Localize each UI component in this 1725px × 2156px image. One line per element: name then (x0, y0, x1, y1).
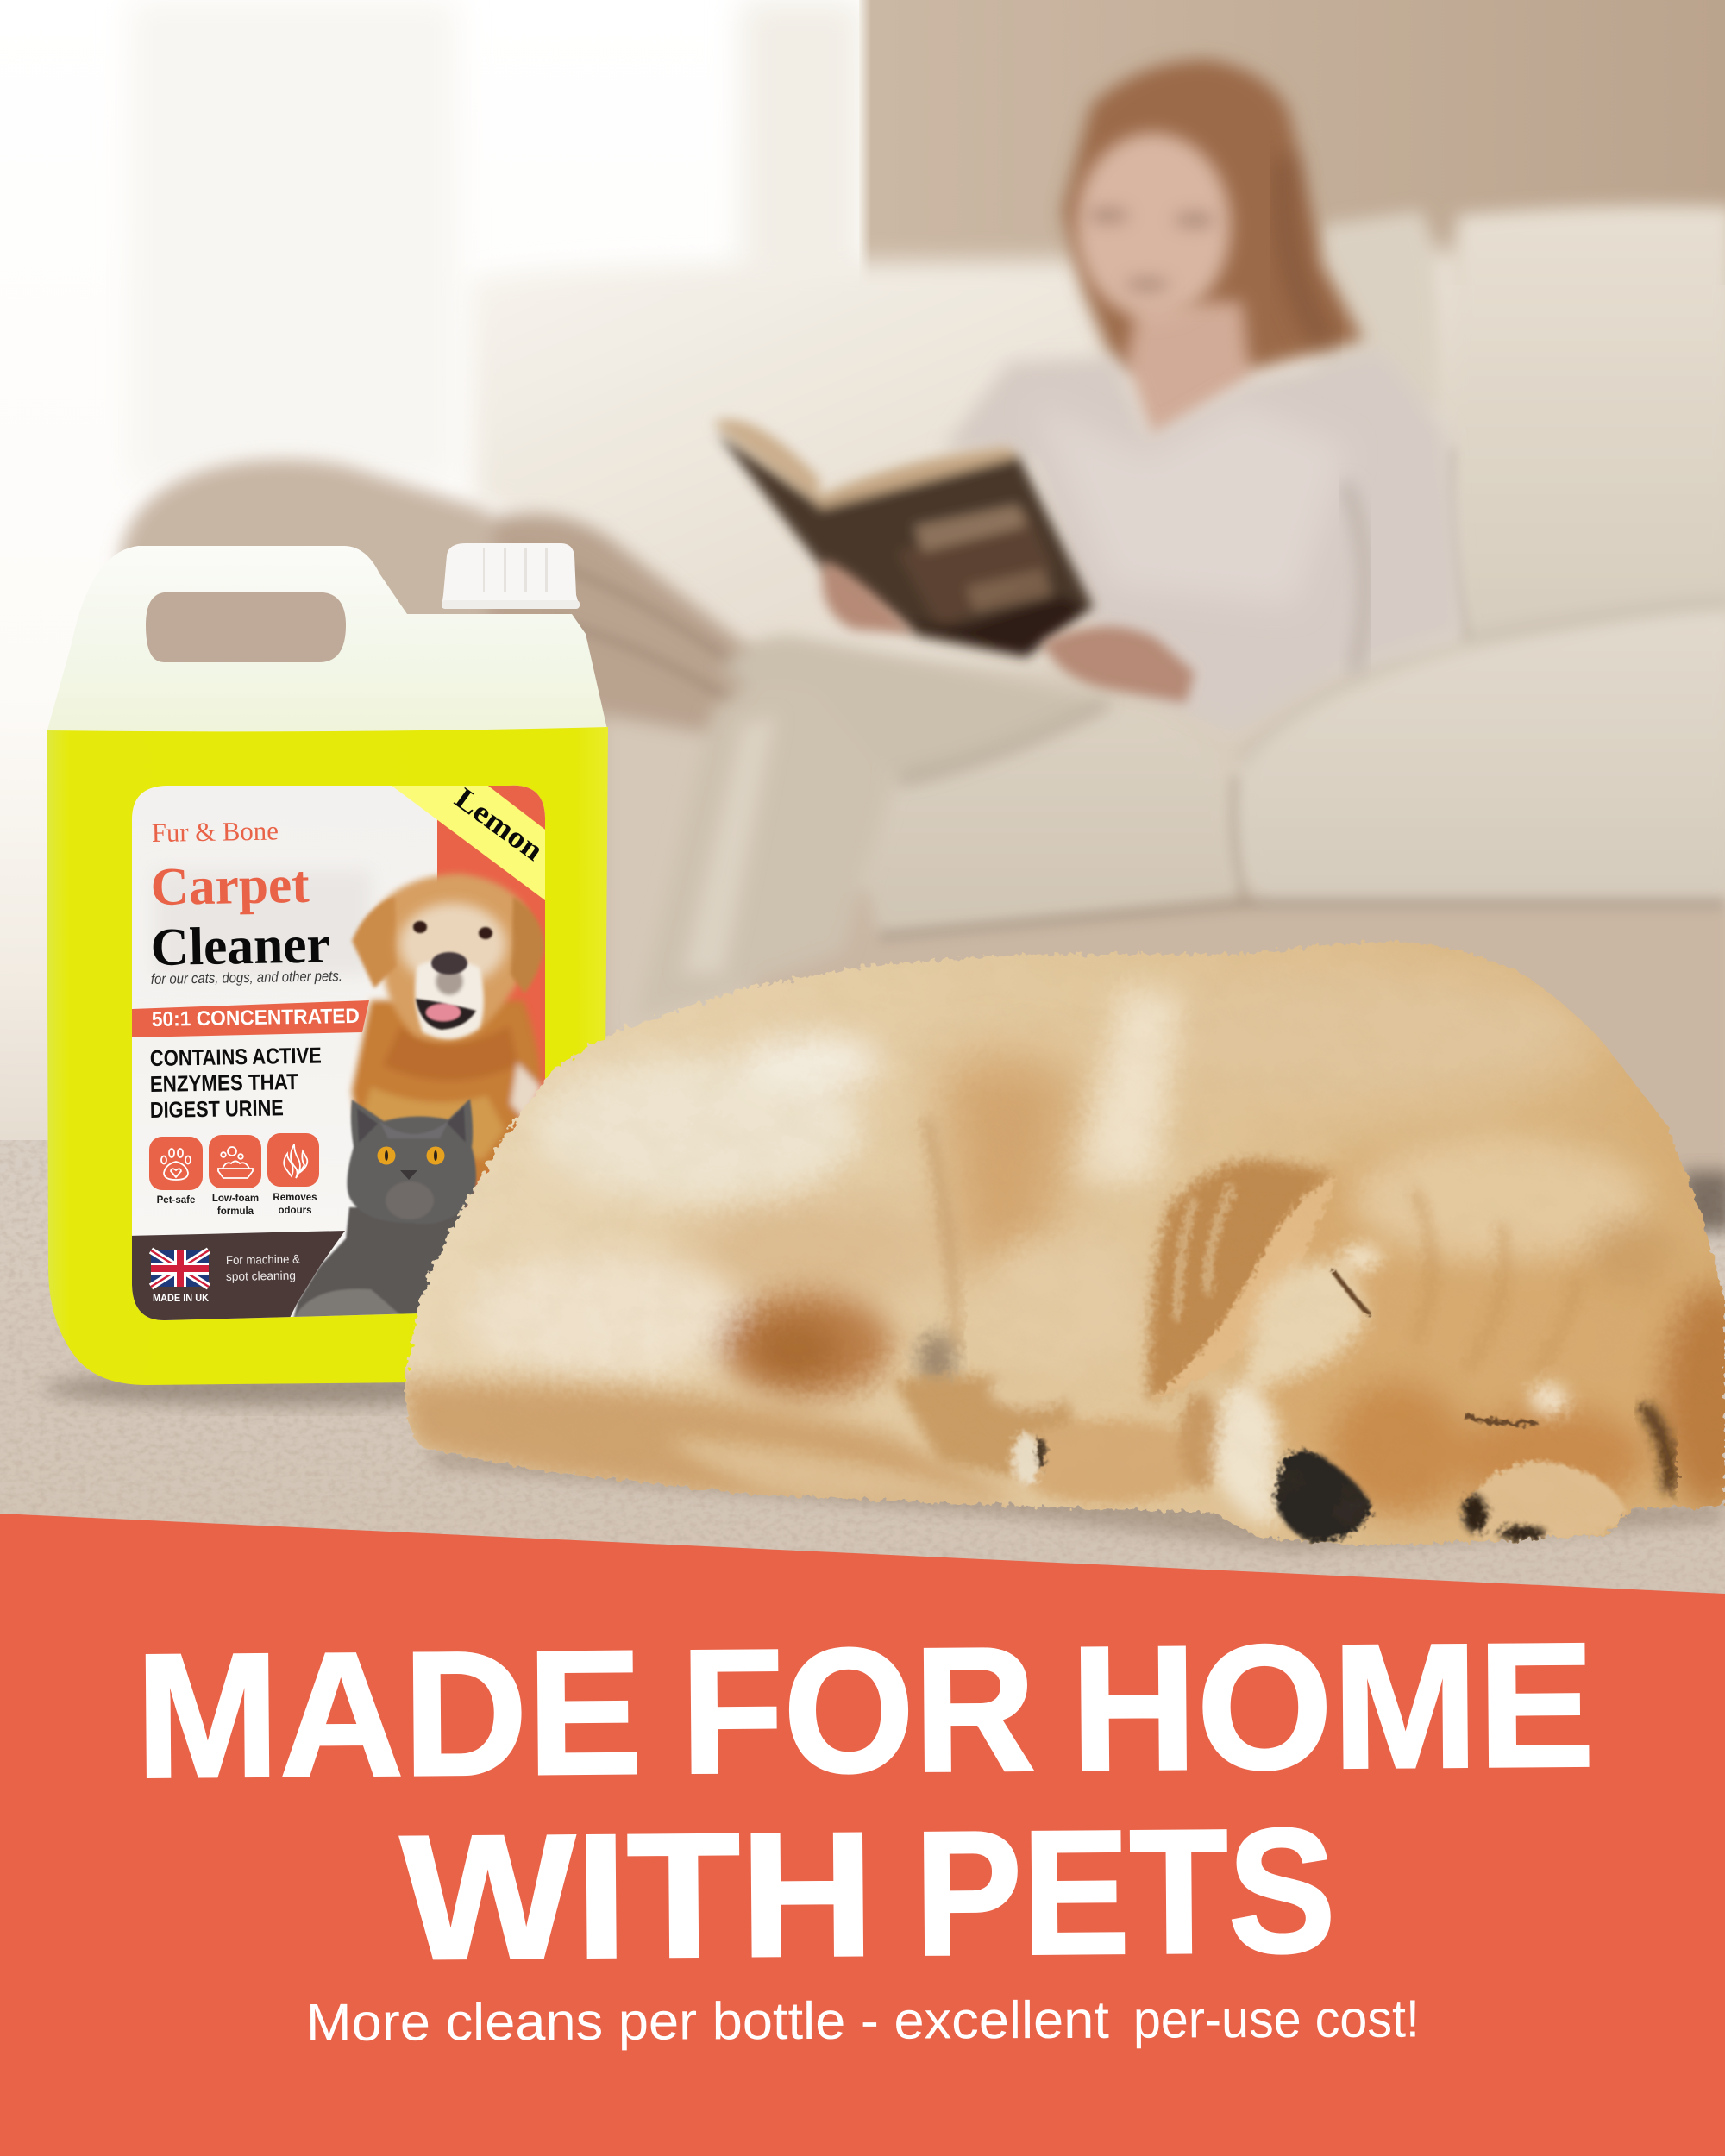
face blaze (1238, 1261, 1367, 1397)
eye patches (1340, 1245, 1382, 1269)
sofa to floor shadow (1682, 1171, 1725, 1232)
enzyme claim: DIGEST URINE (150, 1094, 284, 1123)
paw slit (1037, 1438, 1045, 1469)
right seat cushion (1236, 608, 1725, 901)
shin highlight (681, 716, 776, 975)
paw toe edge (1013, 1433, 1040, 1485)
crease (926, 1119, 957, 1351)
bottle shadow (43, 1371, 561, 1406)
pillow behind woman (1320, 211, 1442, 414)
label background (129, 780, 552, 1324)
background scene: living room (0, 0, 1725, 1623)
cat body (293, 1099, 487, 1324)
hair side shadow (1284, 155, 1328, 345)
cream haunch (535, 1056, 862, 1203)
label dog (352, 874, 544, 1207)
dog ground shadow (431, 1449, 1725, 1551)
cushion shadow lines (880, 448, 1725, 937)
head (1225, 1138, 1690, 1518)
red corner column (437, 819, 545, 1207)
lower right flank (988, 1238, 1151, 1367)
sweater highlight (1035, 405, 1346, 604)
union flag (151, 1250, 209, 1287)
carpet floor (0, 1140, 1725, 1623)
subheading: per-use cost! (1133, 1989, 1420, 2049)
bottle cap (442, 543, 580, 609)
haunch streaks (483, 1268, 656, 1380)
made in uk: MADE IN UK (153, 1294, 210, 1304)
sofa back (470, 250, 1484, 673)
headline line 1: FOR (681, 1610, 1036, 1811)
front leg (892, 1376, 1075, 1476)
cat head (347, 1099, 476, 1224)
icon: pet-safe paw (149, 1137, 203, 1190)
forehead fur strokes (1414, 1190, 1578, 1371)
sweater (943, 349, 1463, 732)
closed eyes (1333, 1270, 1537, 1423)
headline line 2 (400, 1792, 1336, 1996)
sofa (121, 206, 1725, 1177)
book (712, 419, 1094, 657)
sofa lower left (604, 716, 750, 1044)
yellow diagonal stripe (392, 786, 545, 900)
usage note: spot cleaning (226, 1269, 296, 1283)
product title: carpet: Carpet (150, 856, 310, 917)
feature labels (157, 1193, 317, 1217)
throw blanket (483, 514, 776, 743)
concentrate band: 50:1 CONCENTRATED (152, 1005, 360, 1031)
ear flap (1148, 1175, 1337, 1403)
dark footer bar (129, 1231, 345, 1324)
headline line 1: MADE (135, 1614, 643, 1815)
dog body base (397, 936, 1725, 1557)
nose (1275, 1451, 1371, 1542)
tagline: for our cats, dogs, and other pets. (151, 968, 342, 987)
feature labels: odours (279, 1206, 311, 1216)
sofa base (595, 888, 1725, 1177)
feature labels: Removes (273, 1193, 317, 1203)
handle hole (146, 592, 346, 662)
product bottle: carpet cleaner (43, 543, 608, 1406)
dog muzzle (415, 959, 484, 1039)
subheading: More cleans per bottle - excellent (306, 1990, 1109, 2052)
forward paw (1460, 1460, 1626, 1542)
feature labels: Pet-safe (157, 1195, 195, 1206)
mid band (940, 1054, 1078, 1276)
legs (637, 636, 1108, 1018)
dark ear line (1643, 1406, 1670, 1492)
icon: odour removal (267, 1133, 319, 1187)
headline line 2: WITH (400, 1796, 875, 1996)
headline line 1 (135, 1606, 1595, 1815)
dog face light (399, 903, 506, 986)
dog tail (401, 1380, 1020, 1509)
label (129, 780, 552, 1324)
fur mottling (397, 936, 1725, 1557)
window and curtains (0, 0, 871, 1156)
sleeping golden retriever (397, 936, 1725, 1557)
dog head (380, 874, 526, 1042)
tail highlight (664, 1438, 1009, 1505)
woman reading (637, 60, 1463, 1018)
folded paw (1012, 1419, 1205, 1505)
feature labels: Low-foam (212, 1194, 259, 1204)
wall (859, 0, 1725, 285)
sofa base colour block (552, 319, 1725, 1173)
headline line 2: PETS (914, 1792, 1336, 1993)
tan midsection (681, 1199, 940, 1302)
subheading (306, 1989, 1420, 2052)
dog facial features (413, 921, 492, 1030)
leg shadow (897, 703, 1108, 780)
ear fur streaks (1177, 1186, 1233, 1319)
middle seat cushion (867, 706, 1238, 936)
ear back (1148, 1160, 1335, 1403)
concentrate band (132, 1000, 369, 1037)
feature labels: formula (217, 1206, 254, 1217)
rust underside (720, 1292, 893, 1399)
label cat (293, 1099, 487, 1324)
dog ears (352, 897, 544, 993)
product title: cleaner: Cleaner (150, 915, 330, 977)
paw dark marks (1463, 1495, 1546, 1540)
icon: low-foam bowl (209, 1135, 261, 1188)
jug upper translucent body (47, 546, 608, 733)
light stripe (1078, 987, 1182, 1181)
cat eyes (378, 1147, 395, 1164)
enzyme claim (150, 1043, 322, 1123)
orange footer banner (0, 1514, 1725, 2156)
headline line 1: HOME (1070, 1606, 1595, 1808)
face (1076, 133, 1231, 319)
seat top shadow (1242, 606, 1725, 763)
hands (822, 561, 1195, 703)
sofa left arm (121, 460, 621, 1035)
hair (1063, 60, 1364, 369)
right ear (1660, 1285, 1725, 1509)
enzyme claim: ENZYMES THAT (150, 1069, 298, 1097)
usage note (226, 1251, 301, 1283)
dog chest (352, 1000, 542, 1207)
yellow liquid (47, 727, 608, 1385)
muzzle (1214, 1387, 1276, 1522)
right back cushion (1445, 206, 1725, 655)
enzyme claim: CONTAINS ACTIVE (150, 1043, 322, 1071)
neck (1126, 302, 1251, 444)
usage note: For machine & (226, 1251, 301, 1267)
throw fold lines (518, 552, 768, 720)
lemon variant: Lemon (448, 781, 549, 868)
white streak zone (466, 1255, 742, 1376)
sleeve fold (1346, 483, 1365, 673)
facial shadows (1088, 208, 1215, 291)
back (1156, 966, 1604, 1104)
brand name: Fur & Bone (152, 815, 279, 848)
crease shadow (918, 1332, 956, 1390)
